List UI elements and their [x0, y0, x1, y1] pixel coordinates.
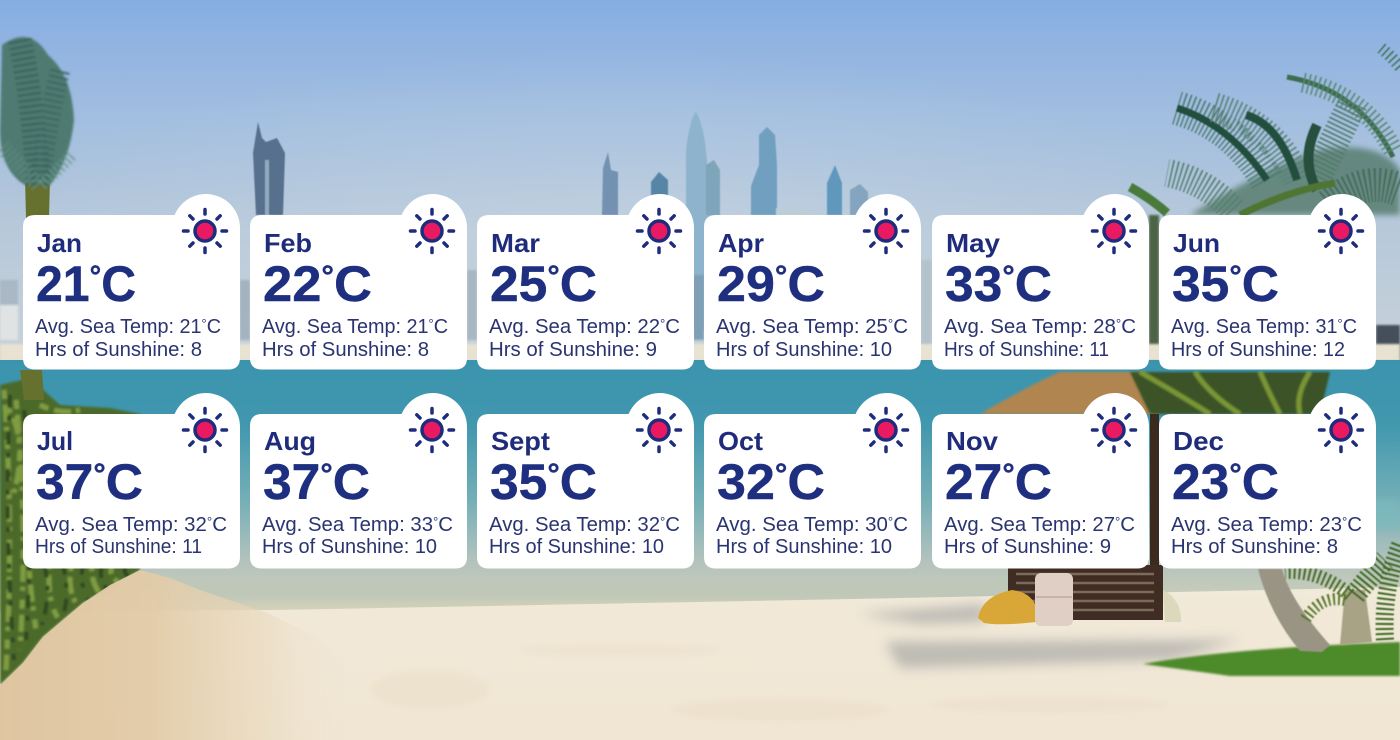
sky	[0, 0, 1400, 360]
air temperature: C	[1015, 256, 1052, 312]
air temperature: 37	[36, 454, 92, 510]
right palm crown	[1130, 47, 1400, 215]
month label: Sept	[491, 426, 550, 456]
grid: monthly weather cards	[23, 194, 1376, 568]
air temperature: 22	[263, 256, 319, 312]
sea temperature: °	[207, 514, 212, 529]
hut post	[1150, 414, 1159, 569]
air temperature: °	[1002, 458, 1015, 491]
beach sand	[0, 587, 1400, 740]
card: November	[932, 393, 1149, 568]
sea temperature: Avg. Sea Temp: 22	[489, 316, 657, 338]
icon: sun	[410, 210, 454, 252]
sunshine hours: Hrs of Sunshine: 8	[262, 339, 429, 361]
air temperature: °	[1229, 260, 1242, 293]
frond: top	[1213, 107, 1297, 180]
card: August	[250, 393, 467, 568]
sea temperature: °	[1342, 514, 1347, 529]
skyline: left tower	[253, 122, 285, 215]
sea temperature: Avg. Sea Temp: 32	[35, 514, 203, 536]
air temperature: 32	[717, 454, 773, 510]
air temperature: 35	[490, 454, 546, 510]
icon: sun	[638, 408, 680, 452]
icon: sun	[184, 210, 226, 252]
sea temperature: C	[212, 514, 227, 536]
air temperature: C	[787, 454, 825, 510]
sea temperature: C	[665, 316, 680, 338]
card: February	[250, 194, 467, 370]
air temperature: °	[1229, 458, 1242, 491]
left bush	[0, 378, 140, 685]
sea temperature: C	[1121, 316, 1136, 338]
sea temperature: C	[1120, 514, 1135, 536]
air temperature: °	[775, 458, 787, 491]
frond: lower left	[1167, 173, 1233, 210]
icon: sun	[638, 210, 680, 252]
sunshine hours: Hrs of Sunshine: 11	[35, 536, 202, 558]
sea temperature: °	[888, 514, 893, 529]
sea temperature: C	[434, 316, 448, 338]
frond: upper left	[1177, 108, 1267, 180]
card: March	[477, 194, 694, 370]
sea temperature: °	[1116, 316, 1121, 331]
sunshine hours: Hrs of Sunshine: 10	[262, 536, 437, 558]
card: September	[477, 393, 694, 568]
frond: upper right	[1287, 77, 1393, 157]
icon: sun	[1320, 210, 1362, 252]
air temperature: C	[560, 256, 597, 312]
air temperature: °	[1002, 260, 1015, 293]
sea temperature: Avg. Sea Temp: 30	[716, 514, 884, 536]
air temperature: 33	[945, 256, 1001, 312]
card: May	[932, 194, 1149, 370]
sea temperature: C	[438, 514, 453, 536]
icon: sun	[410, 408, 454, 452]
air temperature: 21	[36, 256, 92, 312]
card: December	[1159, 393, 1376, 568]
ground shadows	[858, 604, 1240, 668]
sunshine hours: Hrs of Sunshine: 9	[944, 536, 1111, 558]
month label: May	[946, 228, 1001, 258]
air temperature: 35	[1172, 256, 1228, 312]
air temperature: 23	[1172, 454, 1228, 510]
left palm foliage	[0, 37, 74, 185]
icon: sun	[1092, 210, 1136, 252]
sea temperature: Avg. Sea Temp: 23	[1171, 514, 1339, 536]
month label: Mar	[491, 228, 540, 258]
sandy far shore	[0, 344, 1400, 361]
card: July	[23, 393, 240, 568]
card: June	[1159, 194, 1376, 370]
sea temperature: Avg. Sea Temp: 32	[489, 514, 657, 536]
white pouf	[1163, 590, 1181, 622]
air temperature: C	[101, 256, 136, 312]
small palm	[1285, 545, 1400, 645]
sky glow at horizon	[0, 50, 1240, 430]
sea temperature: C	[1347, 514, 1362, 536]
sea temperature: Avg. Sea Temp: 21	[35, 316, 203, 338]
card: April	[704, 194, 921, 370]
sea temperature: C	[1343, 316, 1357, 338]
month label: Apr	[718, 228, 764, 258]
air temperature: C	[560, 454, 597, 510]
yellow pouf	[978, 590, 1036, 624]
air temperature: °	[547, 458, 560, 491]
palm fronds behind cards	[1130, 372, 1330, 414]
sea temperature: Avg. Sea Temp: 31	[1171, 316, 1339, 338]
left palm trunk	[20, 178, 50, 400]
air temperature: C	[334, 256, 372, 312]
frond: top right corner	[1380, 47, 1400, 67]
air temperature: C	[333, 454, 370, 510]
icon: sun	[1092, 408, 1136, 452]
sea light bands	[180, 500, 1400, 600]
sea temperature: °	[433, 514, 438, 529]
sunshine hours: Hrs of Sunshine: 8	[35, 339, 202, 361]
air temperature: C	[106, 454, 143, 510]
air temperature: C	[1242, 454, 1279, 510]
left palm tree	[0, 37, 74, 400]
sea temperature: Avg. Sea Temp: 25	[716, 316, 884, 338]
air temperature: 27	[945, 454, 1001, 510]
sand texture	[370, 644, 1170, 722]
sunshine hours: Hrs of Sunshine: 10	[716, 536, 892, 558]
sea temperature: C	[893, 316, 908, 338]
air temperature: °	[90, 260, 101, 293]
air temperature: 25	[490, 256, 546, 312]
sand dune	[0, 570, 345, 740]
sunshine hours: Hrs of Sunshine: 12	[1171, 339, 1345, 361]
sea temperature: C	[893, 514, 908, 536]
sea temperature: C	[207, 316, 221, 338]
sea temperature: C	[665, 514, 680, 536]
sea	[0, 360, 1400, 610]
month label: Jul	[37, 426, 73, 456]
sea temperature: °	[429, 316, 434, 331]
card: January	[23, 194, 240, 370]
sunshine hours: Hrs of Sunshine: 10	[716, 339, 892, 361]
sunshine hours: Hrs of Sunshine: 10	[489, 536, 664, 558]
card: October	[704, 393, 921, 568]
air temperature: C	[1015, 454, 1052, 510]
palm crown core	[1190, 148, 1400, 215]
icon: sun	[864, 408, 908, 452]
icon: sun	[1320, 408, 1362, 452]
sea temperature: Avg. Sea Temp: 27	[944, 514, 1112, 536]
air temperature: 37	[263, 454, 319, 510]
sea temperature: Avg. Sea Temp: 33	[262, 514, 430, 536]
sunshine hours: Hrs of Sunshine: 8	[1171, 536, 1338, 558]
air temperature: C	[787, 256, 825, 312]
air temperature: °	[321, 260, 334, 293]
frond: base rib	[1240, 183, 1335, 215]
air temperature: 29	[717, 256, 773, 312]
sunshine hours: Hrs of Sunshine: 9	[489, 339, 657, 361]
frond: center right cluster	[1317, 103, 1353, 177]
frond: small lower left	[1130, 187, 1167, 213]
sea temperature: °	[1338, 316, 1343, 331]
grass patch	[1143, 642, 1400, 676]
leaning palm trunk	[1258, 569, 1330, 652]
skyline: central towers	[602, 112, 868, 330]
sea temperature: °	[1115, 514, 1120, 529]
month label: Jun	[1173, 228, 1220, 258]
sea temperature: °	[660, 316, 665, 331]
month label: Dec	[1173, 426, 1224, 456]
sea temperature: °	[660, 514, 665, 529]
month label: Jan	[37, 228, 82, 258]
air temperature: °	[547, 260, 560, 293]
month label: Feb	[264, 228, 312, 258]
sea temperature: Avg. Sea Temp: 28	[944, 316, 1112, 338]
icon: sun	[184, 408, 226, 452]
thatched hut roof	[980, 372, 1160, 414]
sea temperature: °	[202, 316, 207, 331]
month label: Nov	[946, 426, 999, 456]
air temperature: °	[93, 458, 106, 491]
month label: Aug	[264, 426, 316, 456]
sea temperature: °	[888, 316, 893, 331]
sea temperature: Avg. Sea Temp: 21	[262, 316, 430, 338]
distant city strip	[0, 215, 1400, 370]
air temperature: °	[775, 260, 787, 293]
icon: sun	[864, 210, 908, 252]
month label: Oct	[718, 426, 763, 456]
air temperature: °	[320, 458, 333, 491]
hut base with slats	[1008, 565, 1163, 620]
sunshine hours: Hrs of Sunshine: 11	[944, 339, 1109, 361]
cream barrel seat	[1035, 573, 1073, 626]
air temperature: C	[1242, 256, 1279, 312]
